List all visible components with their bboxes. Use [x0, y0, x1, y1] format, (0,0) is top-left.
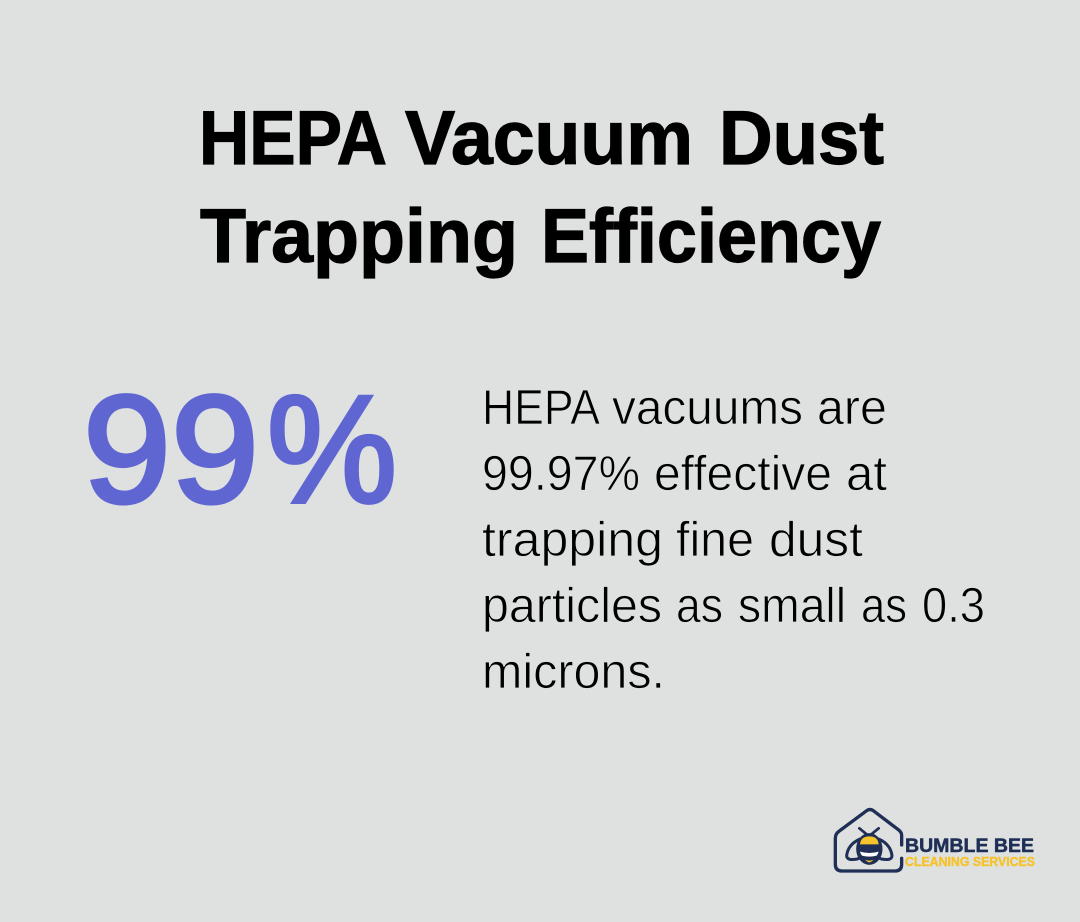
description text: particles: [482, 579, 662, 633]
description text: microns.: [482, 645, 665, 699]
title: Trapping: [200, 194, 518, 279]
description text: effective: [654, 447, 832, 501]
title: HEPA: [199, 96, 387, 181]
logo tagline: CLEANING SERVICES: [905, 854, 1035, 869]
title: [199, 96, 884, 279]
description text: as: [676, 579, 723, 633]
description text: vacuums: [612, 381, 803, 435]
description text: small: [738, 579, 846, 633]
description text: 99.97%: [482, 447, 640, 501]
title: Efficiency: [541, 194, 881, 279]
title: Dust: [719, 96, 884, 181]
description text: are: [817, 381, 887, 435]
logo wordmark: BUMBLE BEE: [905, 836, 1034, 857]
big statistic: 99%: [83, 364, 397, 535]
description text: 0.3: [922, 579, 985, 633]
description text: fine: [676, 513, 754, 567]
description text: as: [861, 579, 907, 633]
title: Vacuum: [405, 96, 693, 181]
description text: trapping: [482, 513, 663, 567]
description text: HEPA: [482, 381, 600, 435]
big statistic: 99%: 99: [83, 364, 259, 535]
big statistic: 99%: %: [267, 364, 397, 535]
description text: at: [846, 447, 887, 501]
icon: house with bee: [835, 809, 902, 871]
description text: dust: [769, 513, 863, 567]
logo: Bumble Bee Cleaning Services: [835, 809, 1035, 871]
description text: [482, 381, 985, 699]
